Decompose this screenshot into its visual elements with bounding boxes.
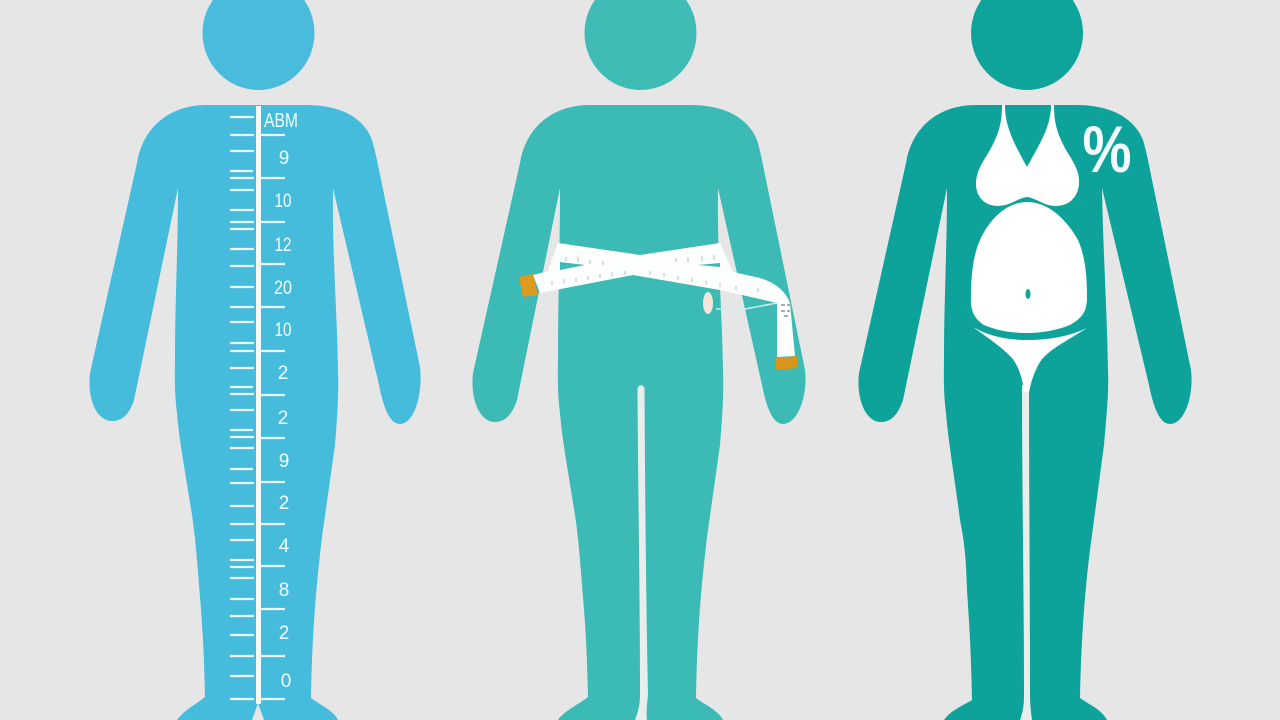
navel — [1026, 289, 1030, 299]
body silhouette teal — [858, 105, 1192, 720]
scale numbers: 2 — [279, 623, 289, 644]
scale numbers: ABM — [264, 110, 298, 132]
scale numbers — [264, 110, 298, 692]
groin fat area — [973, 327, 1087, 392]
scale numbers: 9 — [279, 148, 289, 169]
figure: body fat percentage body — [858, 0, 1192, 720]
belly fat area — [971, 202, 1087, 333]
scale numbers: 20 — [274, 278, 292, 299]
tape end left — [519, 274, 538, 297]
tape tick marks — [552, 255, 758, 292]
scale numbers: 2 — [279, 493, 289, 514]
icon: head turquoise — [584, 0, 696, 90]
leg gap — [635, 385, 648, 720]
measuring tape — [519, 243, 798, 370]
tape band — [533, 243, 795, 357]
figure: height scale body — [89, 0, 421, 720]
tape text marks — [781, 305, 790, 316]
scale numbers: 9 — [279, 451, 289, 472]
icon: head teal — [971, 0, 1083, 90]
scale numbers: 10 — [274, 191, 292, 212]
tape buckle — [703, 292, 713, 314]
leg gap — [1020, 385, 1032, 720]
percent symbol: % — [1082, 112, 1132, 186]
figure: waist tape body — [472, 0, 806, 720]
scale numbers: 2 — [278, 408, 288, 429]
scale numbers: 2 — [278, 363, 288, 384]
scale ticks — [230, 117, 285, 699]
tape buckle line — [716, 303, 777, 309]
height scale — [230, 106, 298, 704]
scale numbers: 0 — [281, 671, 291, 692]
icon: head blue — [202, 0, 314, 90]
scale numbers: 12 — [274, 235, 292, 256]
scale axis — [256, 106, 261, 704]
body silhouette turquoise — [472, 105, 806, 720]
body silhouette blue — [89, 105, 421, 720]
chest fat area — [976, 105, 1079, 206]
scale numbers: 4 — [279, 536, 290, 557]
tape gaps — [560, 262, 720, 270]
scale numbers: 10 — [274, 320, 292, 341]
scale numbers: 8 — [279, 580, 289, 601]
tape end bottom — [776, 356, 798, 370]
